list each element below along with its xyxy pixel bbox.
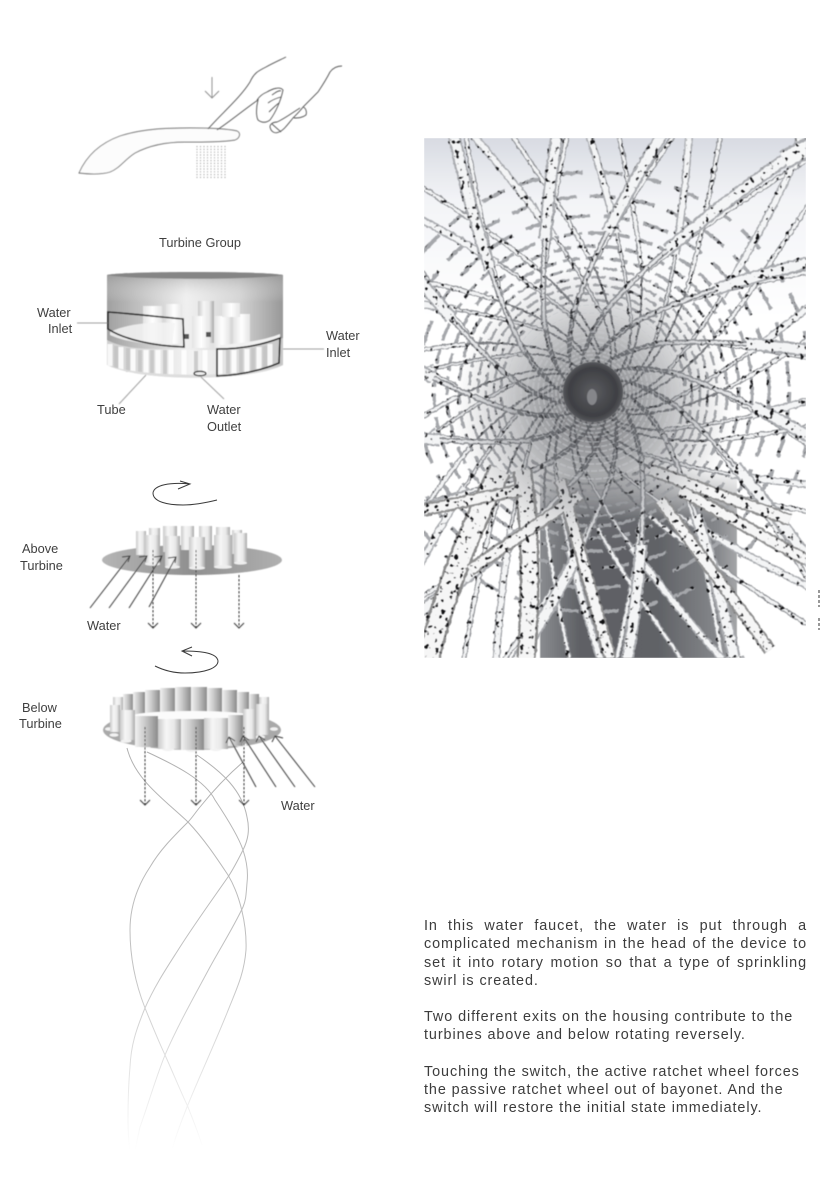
press arrow — [205, 77, 219, 98]
above turbine assembly — [90, 526, 282, 628]
water arrows out — [145, 727, 244, 805]
description text: Two different exits on the housing contribute to the — [424, 1009, 793, 1025]
lattice rings — [424, 170, 806, 614]
faucet body — [79, 128, 239, 174]
description text: swirl is created. — [424, 973, 539, 989]
cropped margin marks — [818, 590, 820, 630]
water arrows out — [153, 550, 239, 628]
label: water outlet: Water — [207, 402, 241, 417]
middle disc — [110, 323, 175, 345]
pointing hand — [208, 57, 286, 130]
tunnel highlight — [587, 389, 597, 405]
description text: In this water faucet, the water is put through a — [424, 918, 807, 934]
photo backdrop — [424, 138, 806, 658]
perforated base disc — [103, 710, 281, 750]
label: water inlet right: Water — [326, 328, 360, 343]
description text: switch will restore the initial state immediately. — [424, 1100, 762, 1116]
description text: the passive ratchet wheel out of bayonet. And the — [424, 1082, 784, 1098]
right inlet frame — [217, 338, 280, 376]
label: water inlet right — [326, 328, 360, 360]
description text: turbines above and below rotating reversely. — [424, 1027, 746, 1043]
description text: set it into rotary motion so that a type of sprinkling — [424, 955, 807, 971]
turbine group housing — [77, 272, 324, 404]
back cylinders — [136, 526, 242, 555]
label: below turbine: Below — [22, 700, 58, 715]
lower tube band — [107, 338, 283, 378]
icon: hand pressing faucet — [79, 57, 342, 178]
rotation arrow below — [155, 647, 218, 673]
upper housing — [107, 272, 283, 362]
water swirl strands — [127, 748, 248, 1165]
description text: Touching the switch, the active ratchet wheel forces — [424, 1064, 800, 1080]
rotation arrow above — [153, 481, 217, 505]
description text — [424, 918, 807, 1116]
label: above turbine: Turbine — [20, 558, 63, 573]
inner turbine cylinders — [143, 301, 250, 348]
heading: Turbine Group: Turbine Group — [159, 235, 241, 250]
spiral water jets — [424, 138, 806, 658]
left inlet frame — [108, 312, 184, 347]
label: water inlet right: Inlet — [326, 345, 351, 360]
dense centre rings — [506, 305, 680, 479]
water arrows in — [90, 556, 176, 608]
label: water inlet left: Inlet — [48, 321, 73, 336]
label: above turbine: Above — [22, 541, 58, 556]
water arrows in — [226, 736, 315, 787]
label: water above: Water — [87, 618, 121, 633]
label: water inlet left: Water — [37, 305, 71, 320]
front cylinders — [145, 533, 247, 570]
leader lines — [77, 323, 324, 404]
label: water outlet: Outlet — [207, 419, 242, 434]
photo: swirling water lattice — [424, 138, 806, 658]
label: water below: Water — [281, 798, 315, 813]
label: below turbine: Turbine — [19, 716, 62, 731]
thumb — [270, 66, 342, 133]
description text: complicated mechanism in the head of the device to — [424, 936, 807, 952]
haze around tunnel — [463, 277, 723, 544]
front ring teeth — [110, 704, 269, 750]
label: below turbine — [19, 700, 62, 731]
tunnel opening — [563, 362, 623, 422]
top rim — [107, 272, 283, 279]
label: tube: Tube — [97, 402, 126, 417]
inner ring opening — [132, 711, 252, 721]
label: above turbine — [20, 541, 63, 573]
water outlet — [194, 371, 206, 376]
label: water outlet — [207, 402, 242, 434]
below turbine assembly — [103, 687, 315, 805]
base disc — [102, 545, 282, 575]
spray of water — [197, 146, 225, 178]
back ring teeth — [113, 687, 269, 727]
label: water inlet left — [37, 305, 73, 336]
foreground jets — [424, 470, 806, 660]
tunnel centre — [463, 277, 723, 544]
